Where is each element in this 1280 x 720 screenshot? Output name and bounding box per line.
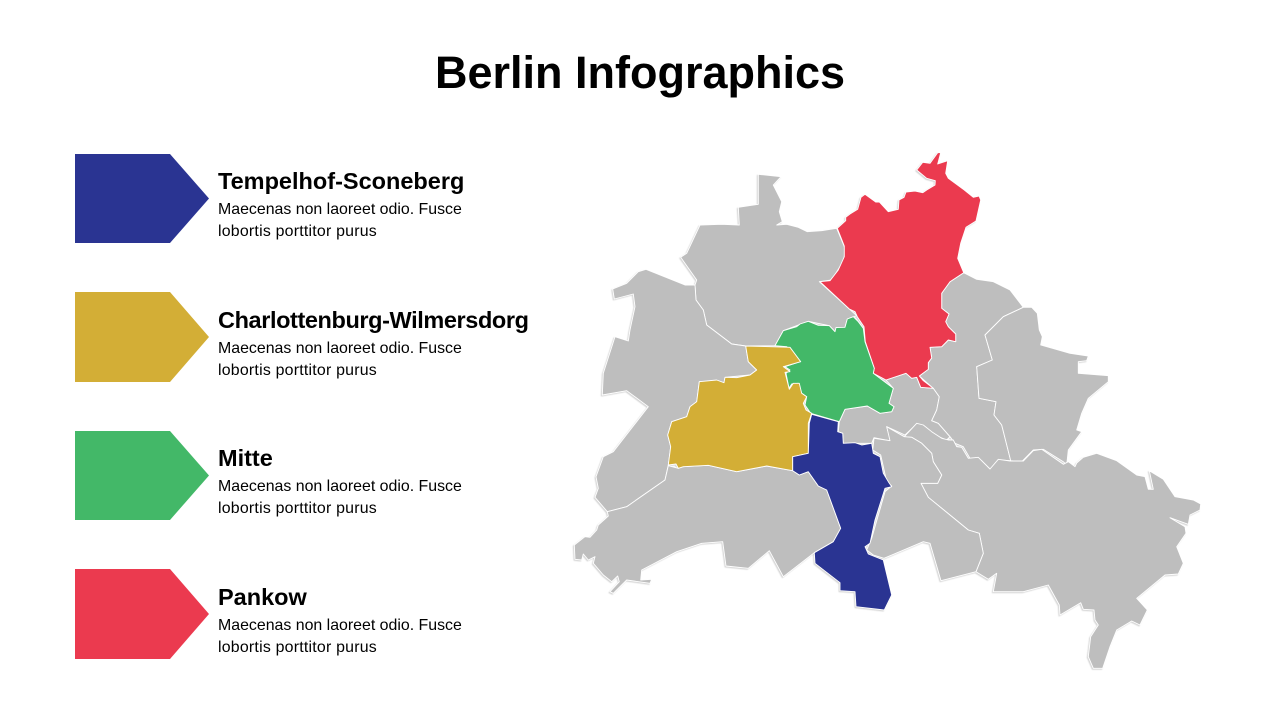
legend item: Tempelhof-Sconeberg: Tempelhof-Sconeberg [218,168,464,194]
legend item: Charlottenburg-Wilmersdorg: Charlottenburg-Wilmersdorg [218,307,529,333]
legend item: Mitte: lobortis porttitor purus [218,500,377,517]
district: Charlottenburg-Wilmersdorf [668,346,812,472]
legend item: Tempelhof-Sconeberg: Maecenas non laoreet odio. Fusce [218,201,462,218]
district: Lichtenberg [919,273,1023,469]
legend item: Charlottenburg-Wilmersdorg: lobortis porttitor purus [218,362,377,379]
district: Treptow-Koepenick [904,423,1201,668]
legend item: Mitte: Mitte [218,445,273,471]
legend item: Pankow: Pankow [218,584,307,610]
legend item: Charlottenburg-Wilmersdorg: Maecenas non laoreet odio. Fusce [218,340,462,357]
district: Mitte [775,317,894,422]
legend item: Pankow [75,569,462,659]
district: Spandau [595,269,757,512]
district: Neukoelln [867,427,983,581]
district: Tempelhof-Schoeneberg [793,414,892,610]
legend item: Pankow: lobortis porttitor purus [218,639,377,656]
district: Pankow [820,153,981,388]
district: Reinickendorf [681,174,857,346]
legend item: Tempelhof-Sconeberg: lobortis porttitor purus [218,223,377,240]
legend item: Charlottenburg-Wilmersdorg [75,292,529,382]
title: Berlin Infographics [435,47,845,98]
legend item: Tempelhof-Sconeberg [75,154,464,243]
legend item: Mitte: Maecenas non laoreet odio. Fusce [218,478,462,495]
legend item: Pankow: Maecenas non laoreet odio. Fusce [218,617,462,634]
district: Marzahn-Hellersdorf [977,307,1108,465]
district: Steglitz-Zehlendorf [574,465,841,593]
district: Friedrichshain-Kreuzberg [838,373,950,443]
legend item: Mitte [75,431,462,520]
